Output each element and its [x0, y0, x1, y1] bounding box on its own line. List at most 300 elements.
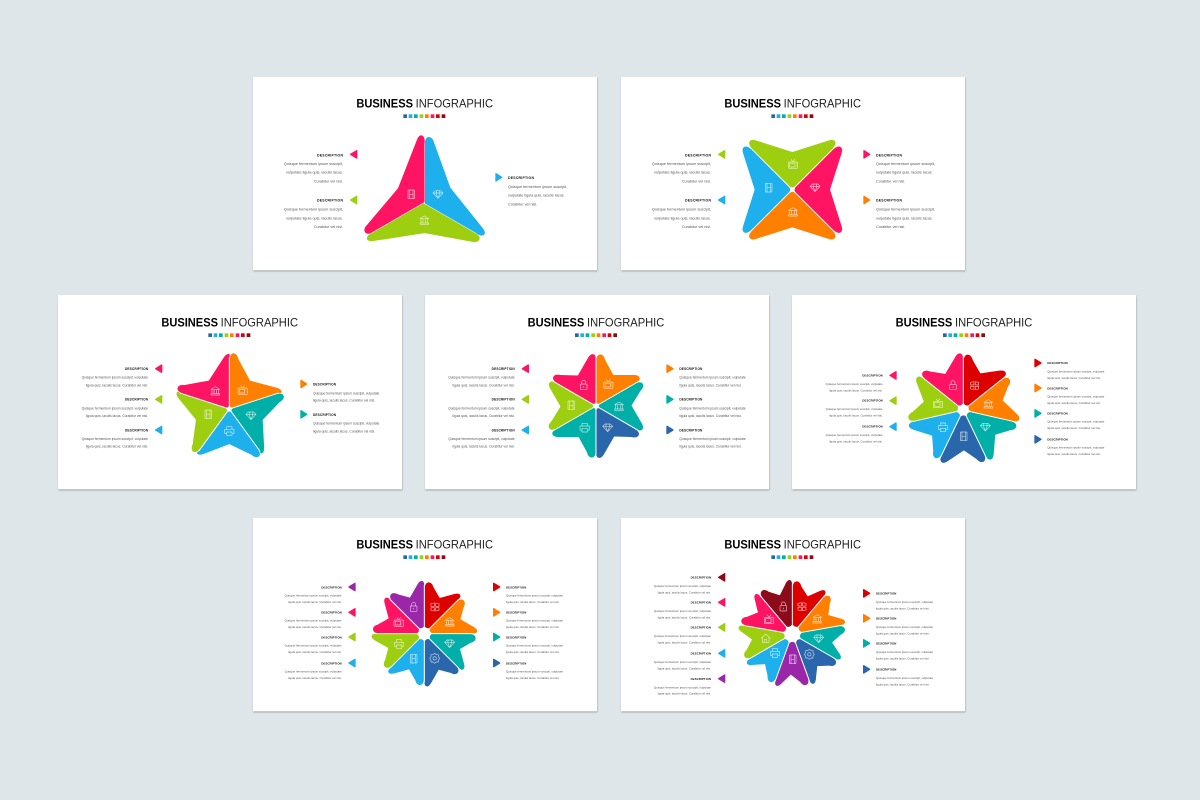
icon: printer — [225, 427, 234, 435]
callout: pink: Quisque fermentum ipsum suscipit, vulputate — [82, 376, 148, 380]
petal: navy — [403, 638, 460, 695]
icon: film — [410, 654, 417, 663]
chart: eight petal star — [363, 572, 486, 695]
callout: blue: Quisque fermentum ipsum suscipit, vulputate — [654, 660, 711, 664]
callout: blue: ligula quis, iaculis lacus. Curabitur vel nisi. — [829, 439, 883, 443]
callout: lime — [285, 633, 355, 654]
callout: lime: Curabitur vel nisi. — [314, 225, 343, 229]
icon: home — [761, 634, 770, 642]
title: INFOGRAPHIC — [416, 96, 493, 110]
icon: grid — [798, 603, 806, 611]
petal: pink — [176, 342, 244, 408]
callout: navy: Quisque fermentum ipsum suscipit, vulputate — [679, 437, 746, 441]
petal: orange — [797, 594, 852, 650]
callout: navy: Quisque fermentum ipsum suscipit, vulputate — [876, 676, 933, 680]
callout: blue: ligula quis, iaculis lacus. Curabitur vel nisi. — [658, 666, 711, 670]
icon: bank — [615, 402, 623, 410]
callout: lime: vulputate ligula quis, iaculis lacus. — [654, 171, 711, 175]
callout: lime — [448, 396, 528, 418]
callout: pink: ligula quis, iaculis lacus. Curabitur vel nisi. — [288, 625, 342, 629]
callout: orange: DESCRIPTION — [506, 610, 526, 614]
petal: lime — [154, 379, 228, 454]
icon: film — [789, 655, 796, 664]
callout: red: DESCRIPTION — [876, 592, 896, 596]
colour key squares — [575, 333, 617, 337]
petal: teal — [430, 634, 476, 670]
callout: navy — [864, 666, 933, 686]
callout: blue — [285, 659, 355, 680]
callout: navy — [667, 426, 746, 449]
panel: slide 4, six petals — [425, 295, 769, 489]
callout: maroon — [654, 574, 725, 594]
callout: pink: DESCRIPTION — [876, 153, 902, 157]
petal: blue — [188, 410, 262, 485]
callout: orange: DESCRIPTION — [1047, 386, 1068, 390]
petal: orange — [429, 598, 486, 655]
icon: lock — [410, 602, 417, 611]
callout: blue: Quisque fermentum ipsum suscipit, vulputate — [285, 670, 342, 674]
icon: grid — [971, 382, 979, 390]
callout: blue: Quisque fermentum ipsum suscipit, vulputate — [448, 437, 515, 441]
callout: orange: Quisque fermentum ipsum suscipit, vulputate — [313, 391, 380, 395]
callout: blue: Quisque fermentum ipsum suscipit, — [652, 208, 711, 212]
title: INFOGRAPHIC — [587, 315, 665, 329]
petal: lime — [900, 370, 959, 422]
callout: lime: DESCRIPTION — [321, 635, 342, 639]
callout: teal — [667, 396, 746, 418]
callout: red: Quisque fermentum ipsum suscipit, vulputate — [876, 600, 933, 604]
callout: lime — [82, 396, 162, 418]
petal: pink — [795, 147, 842, 233]
icon: tv — [764, 615, 774, 624]
callout: maroon: DESCRIPTION — [691, 576, 711, 580]
callout: lime: ligula quis, iaculis lacus. Curabitur vel nisi. — [453, 414, 515, 418]
title: INFOGRAPHIC — [955, 315, 1033, 329]
icon: tv — [604, 379, 613, 388]
callout: red — [1035, 359, 1105, 380]
callout: teal — [1035, 410, 1105, 430]
petal: red — [793, 581, 826, 627]
callout: pink: Quisque fermentum ipsum suscipit, vulputate — [654, 609, 711, 613]
callout: orange: DESCRIPTION — [313, 383, 337, 387]
petal: navy — [576, 407, 640, 470]
callout: purple: DESCRIPTION — [321, 585, 342, 589]
callout: lime: DESCRIPTION — [685, 153, 711, 157]
callout: red: ligula quis, iaculis lacus. Curabitur vel nisi. — [1047, 376, 1101, 380]
callout: lime: vulputate ligula quis, iaculis lacus. — [286, 216, 343, 220]
petal: purple — [388, 572, 446, 629]
petal: lime — [749, 140, 835, 187]
icon: bank — [789, 208, 797, 216]
colour key squares — [943, 333, 985, 337]
petal: lime — [730, 609, 786, 660]
title — [528, 315, 665, 329]
callout: purple: ligula quis, iaculis lacus. Curabitur vel nisi. — [288, 600, 342, 604]
callout: orange: ligula quis, iaculis lacus. Curabitur vel nisi. — [876, 631, 930, 635]
icon: bank — [445, 618, 454, 626]
callout: blue: Quisque fermentum ipsum suscipit, — [508, 185, 567, 189]
callout: teal — [864, 640, 933, 660]
icon: printer — [938, 423, 948, 432]
icon: film — [568, 401, 575, 410]
icon: diamond — [603, 424, 613, 432]
colour key squares — [403, 114, 445, 118]
icon: printer — [394, 640, 404, 648]
icon: diamond — [445, 640, 455, 648]
petal: lime — [363, 612, 420, 670]
title — [896, 315, 1033, 329]
panel: slide 6, eight petals — [253, 518, 597, 711]
callout: red: Quisque fermentum ipsum suscipit, vulputate — [506, 594, 563, 598]
callout: lime: Quisque fermentum ipsum suscipit, vulputate — [654, 634, 711, 638]
petal: lime — [529, 369, 594, 431]
title: BUSINESS — [356, 96, 413, 110]
petal: red — [425, 582, 460, 628]
icon: tv — [788, 159, 798, 168]
icon: lock — [780, 602, 787, 611]
callout: lime: ligula quis, iaculis lacus. Curabitur vel nisi. — [829, 413, 883, 417]
petal: teal left — [552, 408, 595, 458]
petal: blue — [743, 147, 790, 233]
callout: lime — [654, 624, 725, 644]
callout: lime: DESCRIPTION — [862, 399, 883, 403]
title: BUSINESS — [724, 96, 781, 110]
callout: teal: Quisque fermentum ipsum suscipit, vulputate — [1047, 420, 1105, 424]
callout: pink — [654, 599, 725, 619]
petal: blue — [388, 639, 424, 685]
callout: blue — [652, 196, 725, 229]
callout: orange: Quisque fermentum ipsum suscipit, vulputate — [506, 619, 563, 623]
colour key squares — [771, 555, 813, 559]
callout: blue: Curabitur vel nisi. — [682, 225, 711, 229]
callout: blue — [826, 423, 896, 443]
title — [356, 537, 493, 551]
callout: navy: Quisque fermentum ipsum suscipit, vulputate — [1047, 446, 1105, 450]
petal: orange — [596, 354, 640, 404]
callout: orange — [1035, 384, 1105, 405]
chart: three petal star — [337, 134, 485, 288]
petal: orange — [967, 376, 1033, 440]
callout: navy: DESCRIPTION — [506, 661, 526, 665]
callout: pink: Quisque fermentum ipsum suscipit, vulputate — [826, 382, 883, 386]
callout: lime: Quisque fermentum ipsum suscipit, — [284, 208, 343, 212]
callout: blue: ligula quis, iaculis lacus. Curabitur vel nisi. — [288, 676, 342, 680]
petal: teal — [958, 411, 1017, 464]
petal: navy — [927, 414, 987, 478]
callout: pink: ligula quis, iaculis lacus. Curabitur vel nisi. — [453, 383, 515, 387]
callout: orange: ligula quis, iaculis lacus. Curabitur vel nisi. — [679, 383, 742, 387]
callout: purple — [654, 675, 725, 696]
callout: navy — [494, 659, 563, 680]
title: BUSINESS — [528, 315, 584, 329]
icon: grid — [431, 603, 439, 611]
callout: pink: Quisque fermentum ipsum suscipit, vulputate — [285, 619, 342, 623]
callout: pink: Quisque fermentum ipsum suscipit, vulputate — [448, 376, 515, 380]
colour key squares — [208, 333, 250, 337]
title: INFOGRAPHIC — [416, 537, 493, 551]
callout: teal: Quisque fermentum ipsum suscipit, vulputate — [876, 650, 933, 654]
chart: seven petal star — [900, 342, 1033, 478]
callout: teal: ligula quis, iaculis lacus. Curabitur vel nisi. — [506, 650, 560, 654]
chart: four petal star — [743, 140, 842, 239]
callout: blue: Curabitur vel nisi. — [508, 202, 537, 206]
callout: navy: DESCRIPTION — [679, 429, 703, 433]
callout: purple: DESCRIPTION — [691, 677, 711, 681]
callout: lime: DESCRIPTION — [317, 199, 343, 203]
icon: bank — [984, 400, 993, 408]
petal: teal — [799, 625, 850, 665]
callout: teal — [494, 633, 563, 654]
callout: pink: vulputate ligula quis, iaculis lacus. — [286, 171, 343, 175]
callout: lime: Quisque fermentum ipsum suscipit, vulputate — [82, 406, 148, 410]
callout: lime: ligula quis, iaculis lacus. Curabitur vel nisi. — [86, 414, 148, 418]
callout: teal: ligula quis, iaculis lacus. Curabitur vel nisi. — [313, 429, 375, 433]
callout: blue — [82, 426, 162, 449]
callout: pink — [284, 151, 357, 183]
callout: teal: Quisque fermentum ipsum suscipit, vulputate — [679, 406, 746, 410]
petal: blue — [743, 629, 789, 683]
callout: pink — [864, 151, 935, 183]
callout: lime: Quisque fermentum ipsum suscipit, vulputate — [826, 407, 883, 411]
icon: tv — [394, 617, 403, 626]
chart: five petal star — [154, 342, 299, 485]
petal: pink — [373, 598, 419, 633]
icon: gear — [430, 653, 440, 663]
callout: blue: ligula quis, iaculis lacus. Curabitur vel nisi. — [453, 445, 515, 449]
icon: diamond — [810, 184, 820, 192]
callout: lime: Quisque fermentum ipsum suscipit, — [652, 162, 711, 166]
callout: blue — [448, 426, 528, 449]
callout: navy: ligula quis, iaculis lacus. Curabitur vel nisi. — [876, 682, 930, 686]
callout: orange: Quisque fermentum ipsum suscipit, vulputate — [876, 625, 933, 629]
callout: red: Quisque fermentum ipsum suscipit, vulputate — [1047, 370, 1105, 374]
callout: pink: DESCRIPTION — [862, 374, 883, 378]
callout: teal: ligula quis, iaculis lacus. Curabitur vel nisi. — [679, 414, 742, 418]
petal: pink — [337, 134, 452, 235]
callout: navy: DESCRIPTION — [1047, 437, 1068, 441]
callout: lime — [652, 151, 725, 183]
callout: purple: Quisque fermentum ipsum suscipit, vulputate — [654, 685, 711, 689]
callout: blue: vulputate ligula quis, iaculis lacus. — [654, 216, 711, 220]
chart: six petal star — [529, 342, 663, 470]
callout: navy: ligula quis, iaculis lacus. Curabitur vel nisi. — [506, 676, 560, 680]
callout: teal: ligula quis, iaculis lacus. Curabitur vel nisi. — [876, 656, 930, 660]
callout: blue: DESCRIPTION — [492, 429, 515, 433]
title — [724, 96, 861, 110]
callout: orange: DESCRIPTION — [679, 367, 703, 371]
callout: orange: vulputate ligula quis, iaculis lacus. — [876, 216, 933, 220]
callout: orange: DESCRIPTION — [876, 617, 896, 621]
callout: teal: ligula quis, iaculis lacus. Curabitur vel nisi. — [1047, 426, 1101, 430]
petal: lime — [366, 187, 481, 288]
panel: slide 5, seven petals — [792, 295, 1136, 489]
icon: diamond — [980, 423, 990, 431]
icon: tv — [933, 399, 943, 408]
panel: slide 2, four petals — [621, 77, 965, 270]
callout: maroon: Quisque fermentum ipsum suscipit, vulputate — [654, 584, 711, 588]
callout: teal: DESCRIPTION — [506, 635, 526, 639]
callout: orange — [494, 609, 563, 629]
callout: maroon: ligula quis, iaculis lacus. Curabitur vel nisi. — [658, 590, 711, 594]
panel: slide 1, three petals — [253, 77, 597, 288]
callout: pink — [285, 609, 355, 629]
callout: orange: Quisque fermentum ipsum suscipit, vulputate — [679, 376, 746, 380]
petal: navy — [782, 638, 838, 689]
callout: pink: Curabitur vel nisi. — [876, 179, 905, 183]
title: BUSINESS — [161, 315, 218, 329]
callout: orange — [301, 380, 380, 403]
callout: pink: vulputate ligula quis, iaculis lacus. — [876, 171, 933, 175]
callout: teal: DESCRIPTION — [876, 642, 896, 646]
callout: navy: Quisque fermentum ipsum suscipit, vulputate — [506, 670, 563, 674]
callout: pink: ligula quis, iaculis lacus. Curabitur vel nisi. — [658, 615, 711, 619]
panel: slide 3, five petals — [58, 295, 402, 489]
callout: teal: DESCRIPTION — [679, 398, 703, 402]
callout: purple: ligula quis, iaculis lacus. Curabitur vel nisi. — [658, 692, 711, 696]
callout: blue — [654, 650, 725, 670]
petal: pink — [741, 592, 791, 632]
callout: pink: DESCRIPTION — [317, 153, 343, 157]
title: BUSINESS — [356, 537, 413, 551]
callout: red — [864, 590, 933, 610]
panel: slide 7, nine petals — [621, 518, 965, 711]
title — [356, 96, 493, 110]
callout: purple: Quisque fermentum ipsum suscipit, vulputate — [285, 594, 342, 598]
callout: blue — [496, 174, 567, 206]
callout: lime: Quisque fermentum ipsum suscipit, vulputate — [285, 644, 342, 648]
callout: teal — [301, 411, 380, 433]
callout: blue: DESCRIPTION — [321, 661, 342, 665]
callout: lime — [826, 397, 896, 417]
icon: lock — [580, 380, 587, 389]
callout: orange: Quisque fermentum ipsum suscipit, vulputate — [1047, 395, 1105, 399]
callout: blue: ligula quis, iaculis lacus. Curabitur vel nisi. — [86, 445, 148, 449]
callout: pink: Quisque fermentum ipsum suscipit, — [284, 162, 343, 166]
callout: pink: DESCRIPTION — [492, 367, 515, 371]
callout: red: DESCRIPTION — [1047, 361, 1068, 365]
petal: pink — [552, 342, 616, 405]
icon: film — [205, 410, 212, 419]
callout: pink: DESCRIPTION — [321, 610, 342, 614]
icon: bank — [211, 387, 220, 395]
callout: teal: DESCRIPTION — [313, 413, 337, 417]
callout: pink — [82, 365, 162, 387]
callout: orange: Quisque fermentum ipsum suscipit, — [876, 208, 935, 212]
callout: teal: Quisque fermentum ipsum suscipit, vulputate — [506, 644, 563, 648]
callout: blue: DESCRIPTION — [508, 176, 534, 180]
icon: diamond — [433, 191, 443, 198]
callout: lime: DESCRIPTION — [125, 398, 149, 402]
callout: pink: ligula quis, iaculis lacus. Curabitur vel nisi. — [829, 388, 883, 392]
callout: orange — [667, 365, 746, 387]
callout: orange: ligula quis, iaculis lacus. Curabitur vel nisi. — [1047, 401, 1101, 405]
callout: lime: DESCRIPTION — [492, 398, 515, 402]
title — [161, 315, 298, 329]
petal: teal — [231, 392, 299, 458]
callout: lime: DESCRIPTION — [691, 626, 711, 630]
callout: navy — [1035, 436, 1105, 456]
callout: orange: ligula quis, iaculis lacus. Curabitur vel nisi. — [506, 625, 560, 629]
callout: pink — [448, 365, 528, 387]
petal: orange — [749, 192, 835, 239]
title: BUSINESS — [896, 315, 952, 329]
callout: lime: Quisque fermentum ipsum suscipit, vulputate — [448, 406, 515, 410]
petal: maroon — [759, 572, 813, 628]
callout: red — [494, 583, 563, 604]
icon: printer — [580, 423, 589, 432]
petal: purple — [764, 641, 810, 695]
callout: pink: ligula quis, iaculis lacus. Curabitur vel nisi. — [86, 383, 148, 387]
colour key squares — [771, 114, 813, 118]
callout: blue: DESCRIPTION — [862, 425, 883, 429]
callout: lime: ligula quis, iaculis lacus. Curabitur vel nisi. — [658, 640, 711, 644]
callout: teal: DESCRIPTION — [1047, 411, 1068, 415]
callout: pink: Curabitur vel nisi. — [314, 179, 343, 183]
callout: blue: DESCRIPTION — [685, 199, 711, 203]
petal: red — [964, 355, 1006, 405]
callout: pink — [826, 372, 896, 392]
callout: blue: DESCRIPTION — [691, 652, 711, 656]
icon: diamond — [814, 635, 824, 643]
callout: red: ligula quis, iaculis lacus. Curabitur vel nisi. — [506, 600, 560, 604]
icon: tv — [238, 385, 247, 394]
colour key squares — [403, 555, 445, 559]
petal: pink — [920, 342, 986, 407]
icon: film — [765, 183, 772, 192]
callout: pink: DESCRIPTION — [125, 367, 149, 371]
icon: gear — [804, 649, 814, 659]
callout: orange — [864, 615, 933, 635]
petal: blue — [901, 396, 961, 460]
title: INFOGRAPHIC — [221, 315, 298, 329]
callout: navy: DESCRIPTION — [876, 668, 896, 672]
petal: orange — [230, 353, 282, 408]
petal: teal right — [598, 381, 663, 443]
callout: orange: ligula quis, iaculis lacus. Curabitur vel nisi. — [313, 399, 375, 403]
callout: lime — [284, 196, 357, 229]
callout: navy: ligula quis, iaculis lacus. Curabitur vel nisi. — [679, 445, 742, 449]
title — [724, 537, 861, 551]
icon: film — [960, 432, 967, 441]
icon: lock — [950, 381, 956, 390]
callout: teal: Quisque fermentum ipsum suscipit, vulputate — [313, 422, 380, 426]
callout: blue: Quisque fermentum ipsum suscipit, vulputate — [826, 433, 883, 437]
callout: blue: Quisque fermentum ipsum suscipit, vulputate — [82, 437, 148, 441]
callout: purple — [285, 583, 355, 604]
callout: orange — [864, 196, 935, 229]
callout: blue: vulputate ligula quis, iaculis lacus. — [508, 194, 565, 198]
icon: diamond — [246, 412, 256, 420]
callout: pink: Quisque fermentum ipsum suscipit, — [876, 162, 935, 166]
callout: pink: DESCRIPTION — [691, 601, 711, 605]
icon: printer — [770, 649, 780, 657]
icon: bank — [420, 216, 429, 224]
callout: orange: Curabitur vel nisi. — [876, 225, 905, 229]
callout: navy: ligula quis, iaculis lacus. Curabitur vel nisi. — [1047, 452, 1101, 456]
icon: bank — [813, 615, 822, 623]
chart: nine petal star — [730, 572, 852, 695]
callout: orange: DESCRIPTION — [876, 199, 902, 203]
title: INFOGRAPHIC — [784, 96, 861, 110]
callout: blue: DESCRIPTION — [125, 429, 149, 433]
petal: blue — [425, 137, 485, 235]
title: INFOGRAPHIC — [784, 537, 861, 551]
callout: lime: ligula quis, iaculis lacus. Curabitur vel nisi. — [288, 650, 342, 654]
callout: red: ligula quis, iaculis lacus. Curabitur vel nisi. — [876, 606, 930, 610]
title: BUSINESS — [724, 537, 781, 551]
icon: film — [408, 190, 415, 199]
callout: lime: Curabitur vel nisi. — [682, 179, 711, 183]
